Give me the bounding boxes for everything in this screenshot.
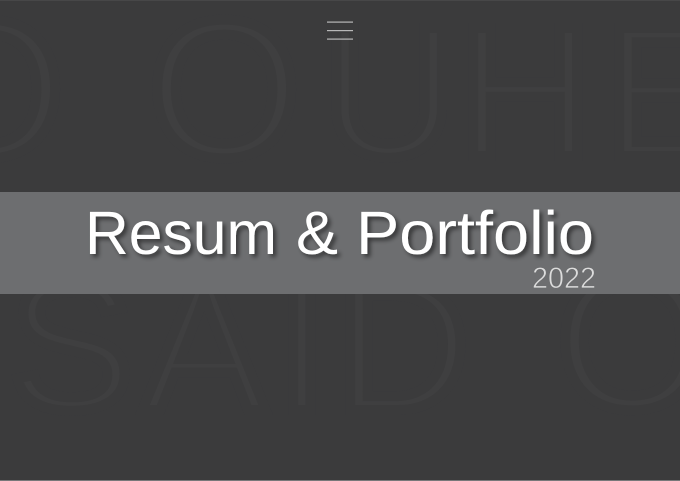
title <box>85 199 594 267</box>
bottom edge line <box>0 480 680 481</box>
ghost lettering: bottom row: I <box>276 243 328 450</box>
icon: hamburger menu <box>327 22 353 40</box>
ghost lettering: bottom row <box>9 232 680 450</box>
ghost lettering: bottom row: D <box>335 243 469 450</box>
title: & <box>296 199 338 267</box>
ghost lettering: bottom row: S <box>9 242 133 449</box>
title: Resum <box>85 199 277 267</box>
title: Portfolio <box>356 199 594 267</box>
year label: 2022 <box>532 262 596 295</box>
title band <box>0 192 680 294</box>
ghost lettering: bottom row: A <box>142 243 266 450</box>
ghost lettering: top row <box>0 0 680 198</box>
top edge line <box>0 0 680 1</box>
